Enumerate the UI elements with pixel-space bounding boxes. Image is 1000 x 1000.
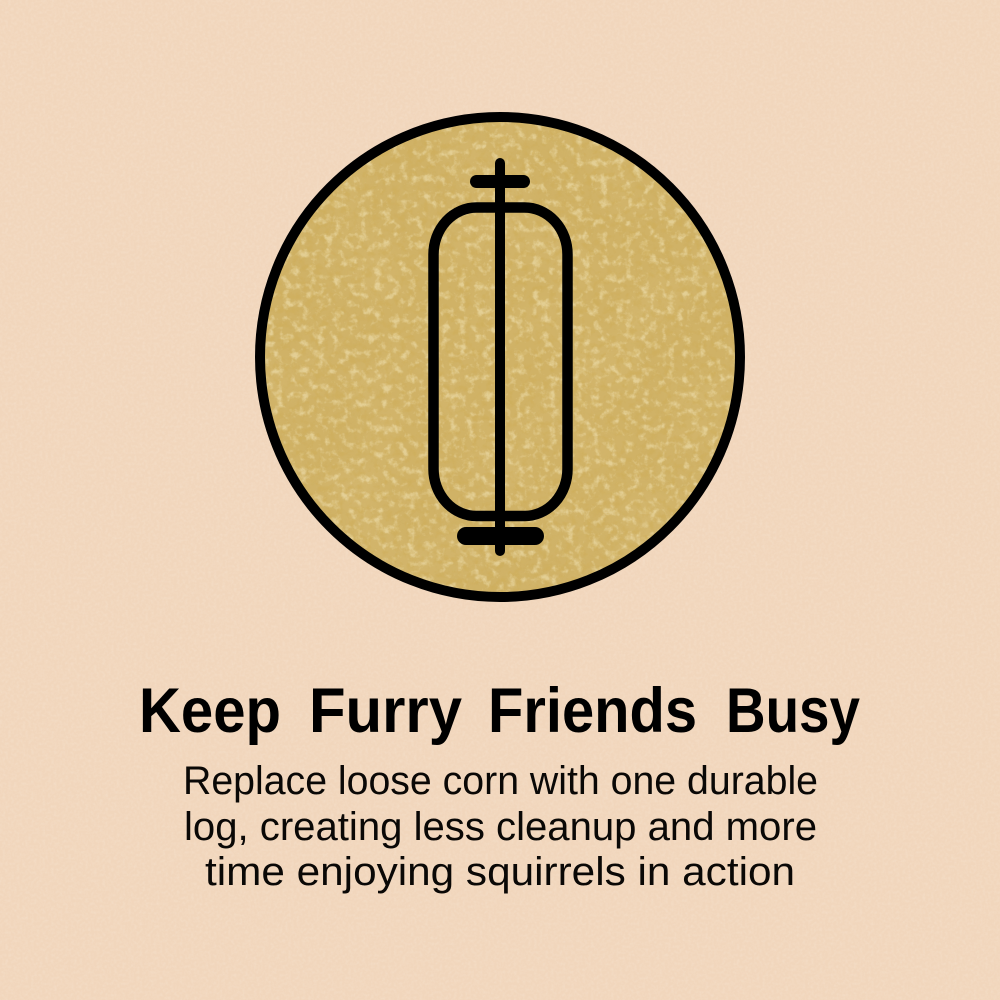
bottom crossbar: [457, 527, 544, 545]
spike: [495, 158, 505, 556]
heading: Friends: [488, 676, 697, 746]
textured gold circle with black outline: [255, 112, 745, 602]
heading: Busy: [726, 676, 860, 746]
body text: log, creating less cleanup and more: [184, 805, 817, 849]
body text: [183, 759, 818, 894]
body text: time enjoying squirrels in action: [205, 850, 795, 894]
top crossbar: [470, 175, 530, 188]
heading: [139, 676, 860, 746]
icon: corn log on feeder spike: [434, 158, 568, 556]
log outline: [434, 208, 568, 516]
heading: Furry: [309, 676, 462, 746]
heading: Keep: [139, 676, 281, 746]
body text: Replace loose corn with one durable: [183, 759, 818, 803]
